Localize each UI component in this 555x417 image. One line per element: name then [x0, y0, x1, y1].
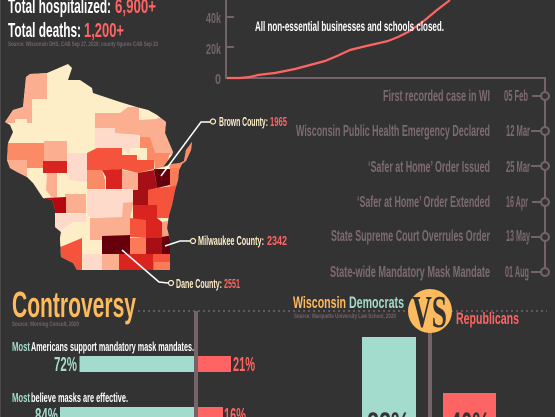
- bar: effective: [60, 407, 194, 417]
- stat: total deaths: 1,200+: [84, 20, 124, 42]
- stat: total deaths: Total deaths:: [8, 20, 81, 42]
- callout: Milwaukee County: [165, 233, 287, 248]
- statement label: Most: [12, 390, 30, 405]
- right divider line: [428, 330, 432, 417]
- bar: not effective: [198, 407, 223, 417]
- callout: Brown County: [161, 114, 287, 176]
- callout: Dane County: Dane County:: [176, 276, 222, 291]
- line chart: cumulative cases: [206, 0, 545, 272]
- survey: support for mask mandates: [12, 339, 255, 376]
- bar: support: [80, 356, 194, 372]
- heading: Republicans: Republicans: [456, 309, 519, 328]
- chart axis: [226, 0, 545, 272]
- bar: Democrats: [362, 337, 416, 417]
- survey: belief masks are effective: [12, 390, 246, 417]
- axis labels: 20k: [206, 41, 221, 58]
- callout: Brown County: 1965: [270, 114, 287, 129]
- heading: Wisconsin Democrats: Wisconsin: [293, 293, 346, 312]
- choropleth map of Wisconsin: [5, 64, 192, 270]
- value: 21%: 21%: [233, 354, 255, 376]
- statement body: believe masks are effective.: [31, 390, 128, 405]
- centre divider line: [194, 311, 198, 417]
- stats: total hospitalized and deaths: [8, 0, 156, 42]
- heading: Controversy: Controversy: [12, 284, 136, 325]
- statement body: Americans support mandatory mask mandates.: [31, 339, 194, 354]
- callout: Milwaukee County: Milwaukee County:: [198, 233, 264, 248]
- callout: Brown County: Brown County:: [219, 114, 268, 129]
- statement label: Most: [12, 339, 30, 354]
- callout: Dane County: [122, 250, 240, 291]
- value: 72%: 72%: [54, 354, 77, 376]
- source note: Morning Consult: Source: Morning Consult, 2020: [12, 321, 79, 328]
- axis labels: [206, 10, 221, 88]
- case curve: [227, 0, 450, 78]
- axis labels: 0: [215, 71, 221, 88]
- heading: Wisconsin Democrats: Democrats: [349, 293, 404, 312]
- VS badge: VS: [412, 286, 447, 337]
- timeline row: first case: 05 Feb: [504, 88, 528, 105]
- source note: Marquette: Source: Marquette University Law School, 2020: [294, 313, 396, 320]
- source note: stats: Source: Wisconsin DHS, CAB Sep 27, 2020; county figures CAB Sep 23: [8, 41, 158, 48]
- callout: Milwaukee County: 2342: [267, 233, 287, 248]
- callout: Dane County: 2551: [224, 276, 240, 291]
- axis labels: 40k: [206, 10, 221, 27]
- VS badge: [408, 286, 452, 337]
- timeline of events: [296, 88, 549, 281]
- bar: Republicans: [443, 393, 496, 417]
- bar: oppose: [198, 356, 231, 372]
- timeline row: safer at home extended: 16 Apr: [506, 194, 528, 211]
